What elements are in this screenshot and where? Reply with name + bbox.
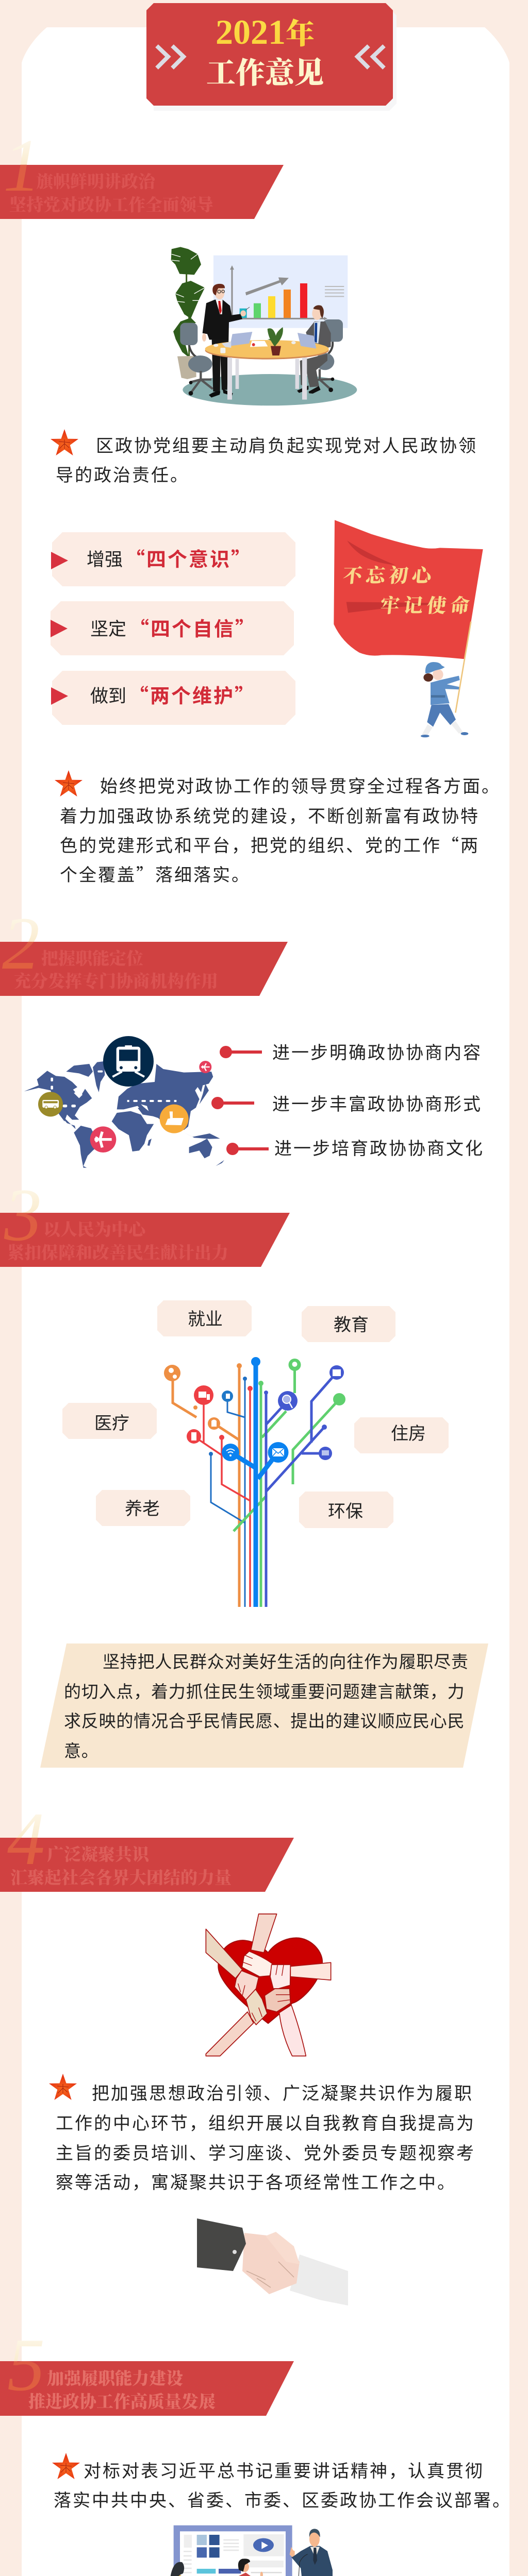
icon: triangle [51, 687, 68, 705]
title block [146, 3, 397, 111]
banner heading line 1: 加强履职能力建设 [47, 2365, 183, 2389]
text panel: people-centered statement [40, 1643, 488, 1768]
bullet 1 [220, 1046, 262, 1058]
banner ribbon [0, 1213, 290, 1267]
text block: building consensus [49, 2074, 475, 2194]
text block: building consensus: 工作的中心环节，组织开展以自我教育自我提高为 [56, 2109, 475, 2134]
pill: four confidences [51, 601, 294, 655]
icon: red star [49, 2074, 77, 2100]
section 3 banner [0, 1173, 290, 1267]
section 4 banner [0, 1797, 294, 1892]
section number 2: 2 [2, 902, 40, 985]
text block: study and implement: 落实中共中央、省委、市委、区委政协工作会议部署。 [54, 2486, 512, 2512]
text block: building consensus: 察等活动，寓凝聚共识于各项经常性工作之中。 [56, 2168, 456, 2194]
section 5 banner [0, 2323, 294, 2416]
label: housing: 住房 [391, 1419, 426, 1445]
text block: leadership through whole process: 色的党建形式和平台，把党的组织、党的工作“两 [60, 832, 480, 857]
icon: triangle [51, 620, 68, 637]
illustration: handshake [197, 2218, 348, 2306]
pill: two upholds: “两个维护” [129, 680, 256, 708]
label: elderly care: 养老 [125, 1495, 160, 1520]
banner heading line 1: 广泛凝聚共识 [47, 1841, 151, 1866]
section 1 banner [0, 124, 284, 219]
section number 4: 4 [7, 1797, 45, 1880]
banner ribbon [0, 165, 284, 219]
icon: red star [52, 2453, 80, 2479]
banner heading line 2: 坚持党对政协工作全面领导 [9, 192, 213, 216]
pill: four consciousness: “四个意识” [125, 544, 252, 572]
label: education: 教育 [334, 1311, 369, 1336]
text block: leadership through whole process: 个全覆盖”落细落实。 [60, 861, 251, 886]
pill: two upholds [51, 671, 295, 725]
text block: leadership through whole process: 着力加强政协系统党的建设，不断创新富有政协特 [60, 802, 480, 827]
bullet 3 [226, 1143, 269, 1155]
title main: 工作意见 [206, 49, 324, 92]
text panel: people-centered statement: 意。 [64, 1737, 99, 1762]
banner heading line 1: 把握职能定位 [41, 945, 143, 970]
icon: red star [51, 429, 78, 455]
illustration: five hands over a heart [206, 1914, 331, 2056]
pill: four consciousness: 增强 [87, 545, 123, 571]
label: elderly care [96, 1490, 190, 1526]
list: three consultation points [211, 1039, 484, 1160]
banner heading line 1: 旗帜鲜明讲政治 [36, 168, 157, 193]
label: environment [299, 1492, 393, 1528]
icon: right chevrons [357, 46, 384, 68]
title plate [146, 3, 393, 106]
banner heading line 2: 汇聚起社会各界大团结的力量 [10, 1865, 232, 1889]
text block: study and implement [52, 2453, 512, 2512]
text block: political responsibility [51, 429, 477, 486]
pill: two upholds: 做到 [90, 682, 126, 708]
label: healthcare: 医疗 [94, 1409, 129, 1434]
pill: four consciousness [51, 532, 295, 586]
banner ribbon [0, 942, 288, 996]
label: housing [354, 1417, 449, 1453]
illustration: girl with red flag: 不忘初心 [342, 560, 437, 588]
text block: political responsibility: 区政协党组要主动肩负起实现党对人民政协领 [96, 432, 477, 457]
icon: left chevrons [157, 46, 184, 68]
title year: 2021年 [216, 11, 315, 53]
pill: four confidences: 坚定 [90, 615, 126, 641]
label: employment: 就业 [188, 1305, 223, 1330]
banner heading line 2: 推进政协工作高质量发展 [28, 2388, 216, 2413]
illustration: lecture presentation [162, 2526, 336, 2576]
banner heading line 2: 紧扣保障和改善民生献计出力 [7, 1240, 228, 1264]
text panel: people-centered statement: 坚持把人民群众对美好生活的向往作为履职尽责 [103, 1648, 469, 1673]
list item 2: 进一步丰富政协协商形式 [272, 1090, 482, 1115]
chart: circuit tree of livelihood icons [164, 1357, 345, 1607]
list item 3: 进一步培育政协协商文化 [274, 1134, 484, 1160]
banner heading line 2: 充分发挥专门协商机构作用 [14, 968, 218, 992]
label: education [302, 1306, 395, 1342]
illustration: girl with red flag [334, 520, 483, 737]
icon: red star [55, 770, 82, 796]
pill: four confidences: “四个自信” [129, 613, 256, 641]
text block: building consensus: 把加强思想政治引领、广泛凝聚共识作为履职 [92, 2079, 473, 2105]
text block: study and implement: 对标对表习近平总书记重要讲话精神，认真贯彻 [84, 2457, 484, 2482]
text panel: people-centered statement: 求反映的情况合乎民情民愿、提出的建议顺应民心民 [64, 1707, 465, 1732]
list item 1: 进一步明确政协协商内容 [272, 1039, 482, 1064]
label: healthcare [62, 1403, 157, 1439]
text block: building consensus: 主旨的委员培训、学习座谈、党外委员专题视察考 [56, 2139, 475, 2164]
illustration: world map with transport icons [24, 1036, 224, 1168]
text block: leadership through whole process: 始终把党对政协工作的领导贯穿全过程各方面。 [100, 772, 501, 798]
section number 1: 1 [3, 124, 41, 207]
section number 3: 3 [4, 1173, 42, 1257]
banner ribbon [0, 2361, 294, 2416]
text block: political responsibility: 导的政治责任。 [56, 461, 189, 486]
banner heading line 1: 以人民为中心 [43, 1216, 148, 1241]
banner ribbon [0, 1838, 294, 1892]
text block: leadership through whole process [55, 770, 501, 886]
section 2 banner [0, 902, 288, 996]
label: employment [157, 1300, 252, 1336]
bullet 2 [211, 1097, 254, 1109]
illustration: meeting with chart [171, 247, 357, 405]
icon: triangle [51, 552, 68, 569]
illustration: girl with red flag: 牢记使命 [379, 590, 475, 618]
label: environment: 环保 [328, 1497, 363, 1522]
section number 5: 5 [7, 2323, 45, 2406]
title shadow [154, 8, 397, 111]
text panel: people-centered statement: 的切入点，着力抓住民生领域重要问题建言献策，力 [64, 1678, 465, 1703]
